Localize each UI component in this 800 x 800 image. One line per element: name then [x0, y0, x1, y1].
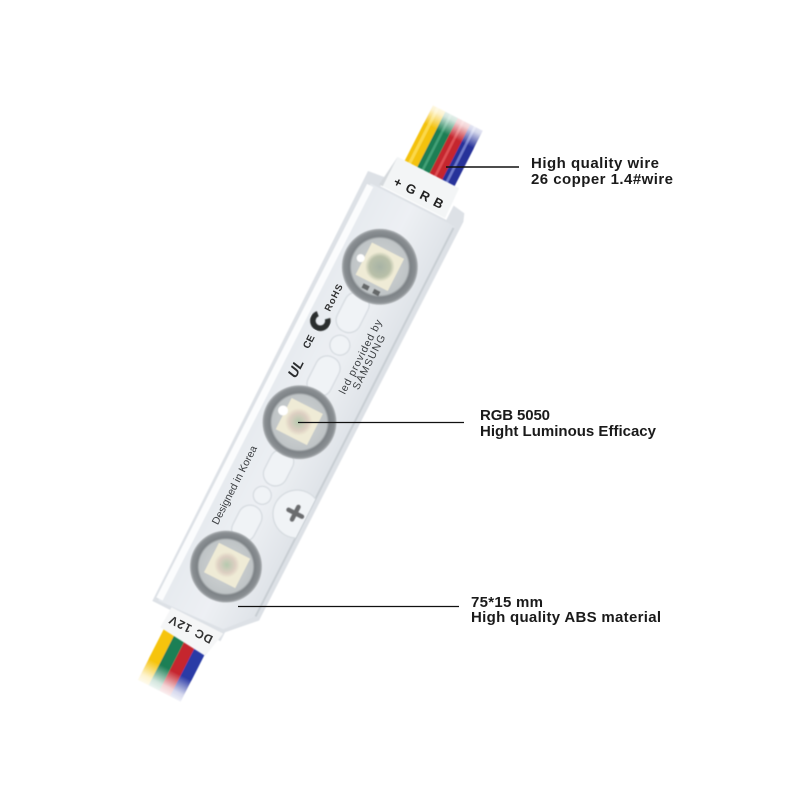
bottom wires: [131, 622, 214, 708]
screw cross: [285, 504, 305, 523]
wire text: 26 copper 1.4#wire: [531, 171, 673, 188]
top wires: [396, 97, 492, 194]
LED middle: [250, 372, 349, 472]
LED bottom: [178, 518, 274, 615]
material text: 75*15 mm: [471, 594, 543, 611]
chip text: RGB 5050: [480, 407, 550, 424]
DC 12V label: DC 12V: [167, 613, 215, 647]
material text: [471, 594, 661, 626]
chip text: [480, 407, 657, 440]
LED module: [113, 87, 507, 721]
module housing: [138, 148, 476, 671]
Samsung label: led provided by: [337, 317, 385, 396]
leader line: [298, 422, 464, 424]
certification marks: [284, 312, 329, 380]
leader line: [446, 166, 519, 168]
embossed pills and circles: [226, 288, 408, 563]
callout: wire: [446, 155, 673, 188]
RoHS label: RoHS: [323, 283, 346, 313]
LED top: [329, 216, 431, 318]
connector label +GRB: + G R B: [391, 174, 446, 212]
Designed in Korea label: Designed in Korea: [210, 444, 260, 527]
Samsung label: SAMSUNG: [350, 333, 388, 392]
chip text: Hight Luminous Efficacy: [480, 423, 657, 440]
callout: material: [238, 594, 661, 626]
wire text: High quality wire: [531, 155, 659, 172]
callout: LED chip: [298, 407, 657, 440]
certification marks: UL: [284, 356, 307, 380]
leader line: [238, 606, 459, 608]
material text: High quality ABS material: [471, 609, 661, 626]
certification marks: CE: [301, 333, 318, 351]
wire text: [531, 155, 673, 188]
